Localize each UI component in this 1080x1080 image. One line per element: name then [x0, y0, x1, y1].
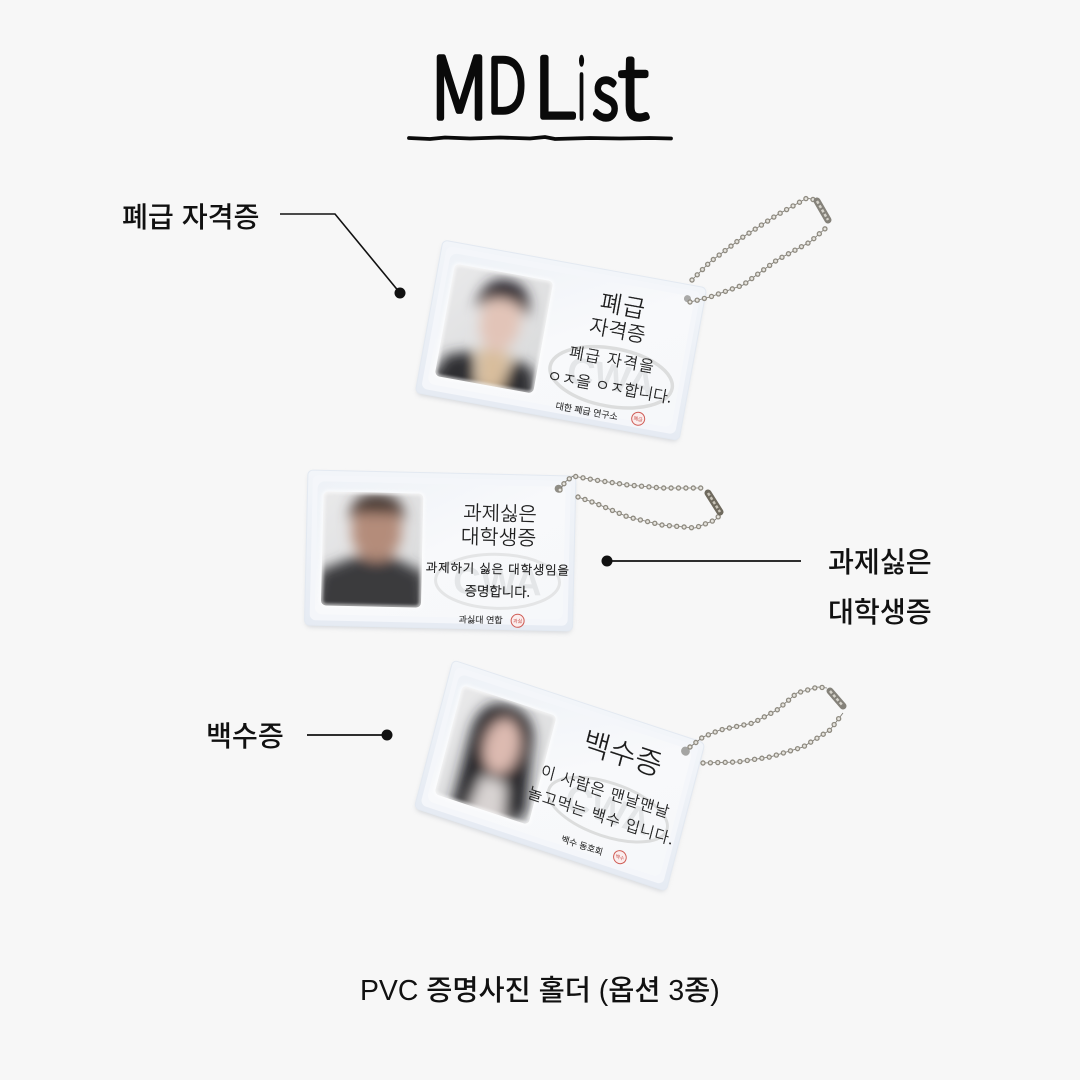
label: 과제싫은 대학생증 — [828, 546, 932, 628]
leader line: 폐급 자격증 — [280, 214, 406, 298]
label: 백수증: 백수증 — [206, 720, 284, 752]
ball chain — [690, 687, 843, 763]
card text — [425, 496, 571, 628]
card text: 대한 폐급 연구소 — [555, 399, 619, 423]
card text — [518, 705, 697, 879]
label: 과제싫은 대학생증: 대학생증 — [828, 596, 932, 628]
card text: 백수 동호회 — [560, 832, 604, 858]
photo — [321, 492, 423, 608]
hole — [683, 295, 692, 303]
watermark: CWA — [453, 560, 542, 604]
title: i — [577, 23, 586, 142]
stamp: 폐급 — [633, 415, 644, 424]
hole — [555, 485, 563, 493]
photo — [435, 266, 552, 393]
card text: 폐급 — [598, 282, 649, 325]
leader line: 과제싫은 대학생증 — [602, 556, 801, 566]
card text: ㅇㅈ을 ㅇㅈ합니다. — [545, 362, 674, 408]
stamp: 과싫 — [513, 618, 523, 625]
caption: PVC 증명사진 홀더 (옵션 3종) — [360, 975, 720, 1007]
stamp — [612, 849, 628, 865]
title: L — [534, 22, 575, 141]
title underline — [409, 137, 671, 139]
keychain: 백수증 — [414, 660, 843, 893]
watermark: CWA — [564, 350, 658, 407]
card text: 자격증 — [587, 309, 648, 349]
stamp: 백수 — [615, 853, 625, 863]
watermark — [435, 553, 560, 610]
label: 폐급 자격증: 폐급 자격증 — [122, 201, 260, 233]
title: M — [431, 22, 488, 143]
title: s — [593, 34, 618, 139]
card text: 과제싫은 — [463, 497, 537, 527]
card — [304, 470, 576, 633]
watermark — [542, 764, 674, 855]
label: 과제싫은 대학생증: 과제싫은 — [828, 546, 932, 578]
title — [431, 18, 648, 143]
card text: 과제하기 싫은 대학생임을 — [426, 557, 570, 579]
stamp — [631, 411, 646, 426]
card text: 놀고먹는 백수 입니다. — [526, 780, 677, 850]
card text: 과싫대 연합 — [459, 612, 503, 626]
hole — [680, 745, 691, 757]
watermark: CWA — [561, 775, 655, 844]
card text: 백수증 — [579, 718, 667, 785]
ball chain — [690, 198, 828, 302]
keychain: 과제싫은 대학생증 — [304, 470, 720, 633]
keychain: 폐급 자격증 — [415, 198, 828, 442]
card text — [541, 275, 690, 432]
leader line: 백수증 — [307, 730, 392, 740]
title: D — [487, 27, 526, 134]
card text: 폐급 자격을 — [568, 339, 658, 378]
card — [414, 660, 705, 893]
card — [415, 240, 707, 442]
stamp — [511, 614, 524, 627]
watermark — [545, 338, 677, 417]
card text: 대학생증 — [461, 519, 537, 551]
title: t — [618, 18, 648, 143]
photo — [436, 688, 556, 824]
card text: 이 사람은 맨날맨날 — [539, 758, 673, 823]
card text: 증명합니다. — [464, 580, 530, 601]
ball chain — [560, 476, 720, 528]
